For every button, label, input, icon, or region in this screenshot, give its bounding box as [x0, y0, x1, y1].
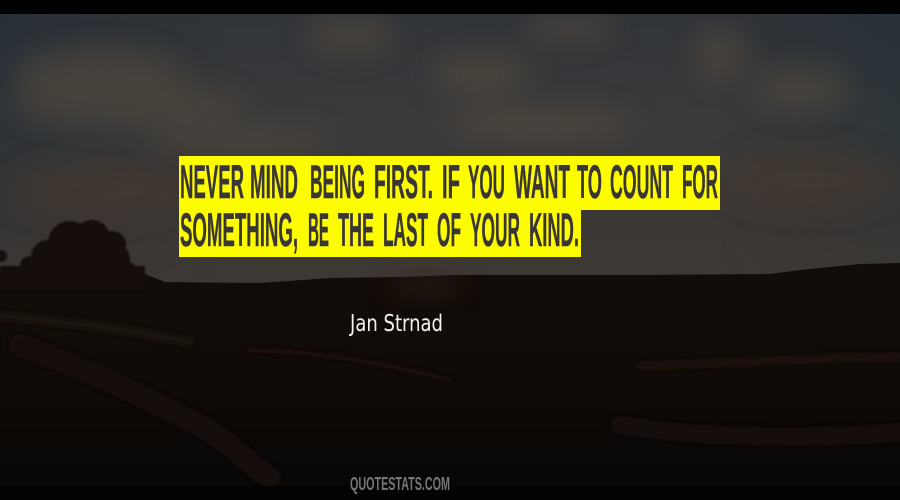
- background: dusk sky: [0, 14, 900, 283]
- quote line 1: YOU: [468, 155, 505, 208]
- quote line 1: FIRST.: [374, 155, 433, 208]
- quote text: KIND.: [529, 203, 579, 256]
- quote highlight: first line: [179, 156, 720, 210]
- quote text: [180, 155, 718, 256]
- quote highlight: second line: [179, 209, 581, 257]
- quote line 1: TO: [577, 155, 602, 208]
- quote poster: FOR: [682, 155, 718, 208]
- tree silhouette: [0, 220, 145, 290]
- quote line 1: IF: [442, 155, 460, 208]
- site credit: QUOTESTATS.COM: [350, 474, 450, 494]
- background: dark landscape with tree line: [0, 220, 900, 500]
- quote line 1: NEVER: [180, 155, 244, 208]
- field strokes: [0, 316, 900, 478]
- quote line 1: MIND: [250, 155, 298, 208]
- quote line 2: LAST: [383, 203, 428, 256]
- author name: Jan Strnad: [348, 311, 443, 337]
- quote line 2: SOMETHING,: [180, 203, 298, 256]
- quote line 1: COUNT: [610, 155, 673, 208]
- top letterbox bar: [0, 0, 900, 14]
- quote line 1: BEING: [310, 155, 365, 208]
- quote line 1: WANT: [514, 155, 570, 208]
- quote line 2: BE: [308, 203, 329, 256]
- quote line 2: THE: [338, 203, 374, 256]
- quote line 2: YOUR: [470, 203, 520, 256]
- quote line 2: OF: [437, 203, 461, 256]
- bottom letterbox bar: [0, 486, 900, 500]
- quote line 1: [180, 155, 718, 208]
